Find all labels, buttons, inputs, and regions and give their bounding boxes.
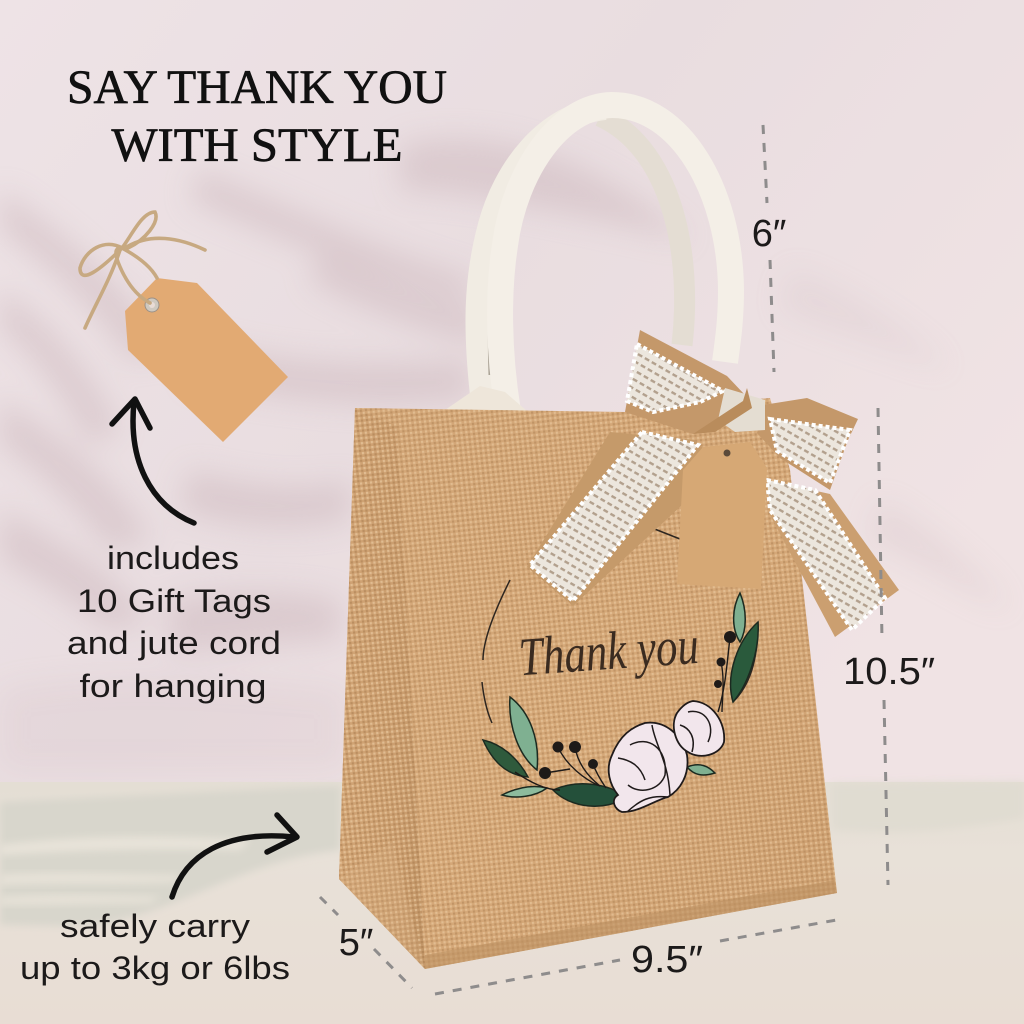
arrow: to gift tag <box>112 399 194 523</box>
thin circle line <box>482 526 758 723</box>
title: SAY THANK YOU <box>67 61 447 114</box>
dimension: bag depth 5 in <box>320 897 412 988</box>
berry stems <box>515 637 730 790</box>
text: gift tags note: includes <box>107 540 239 576</box>
knot <box>693 388 765 434</box>
palm leaf shadows <box>0 138 1010 770</box>
text: gift tags note <box>67 540 281 704</box>
bottom hem <box>425 880 837 969</box>
text: gift tags note: 10 Gift Tags <box>77 583 271 619</box>
text: carry weight note: safely carry <box>60 908 250 944</box>
front handle <box>500 105 731 412</box>
background wall <box>0 0 1024 790</box>
text: gift tags note: and jute cord <box>67 625 281 661</box>
dimension: bag height 10.5 in <box>843 408 935 885</box>
title <box>67 61 447 172</box>
bottom fold <box>339 842 425 969</box>
side gusset <box>339 408 425 969</box>
wreath illustration <box>482 526 758 812</box>
handles <box>445 105 731 420</box>
back handle <box>600 116 685 345</box>
front face <box>339 398 837 969</box>
dimension: bag width 9.5 in: 9.5″ <box>631 939 703 981</box>
left loop <box>625 330 745 434</box>
handle base tab <box>445 386 535 420</box>
dimension: handle height 6 in: 6″ <box>752 213 786 255</box>
bag <box>339 398 837 969</box>
ribbon tail left <box>527 432 722 606</box>
dimension: bag depth 5 in: 5″ <box>339 922 373 964</box>
thank you script: Thank you <box>517 615 701 687</box>
dimension: bag height 10.5 in: 10.5″ <box>843 651 935 693</box>
icon: gift tag with jute cord <box>80 212 288 442</box>
hanging kraft tag <box>677 442 767 589</box>
text: carry weight note: up to 3kg or 6lbs <box>20 950 290 986</box>
right loop <box>757 398 858 490</box>
floor <box>0 782 1024 1024</box>
title: WITH STYLE <box>112 119 402 172</box>
text: carry weight note <box>20 908 290 986</box>
large peony <box>609 723 688 812</box>
dimension: handle height 6 in <box>752 125 786 372</box>
rear left strap <box>477 108 605 395</box>
ribbon tail right <box>767 480 899 637</box>
ribbon bow <box>527 330 899 637</box>
dimension: bag width 9.5 in <box>435 919 842 994</box>
leaves <box>483 593 758 806</box>
strap seam <box>489 230 500 375</box>
arrow: to bag base <box>172 815 297 897</box>
text: gift tags note: for hanging <box>80 668 266 704</box>
berries <box>539 631 736 779</box>
small peony <box>674 701 724 756</box>
